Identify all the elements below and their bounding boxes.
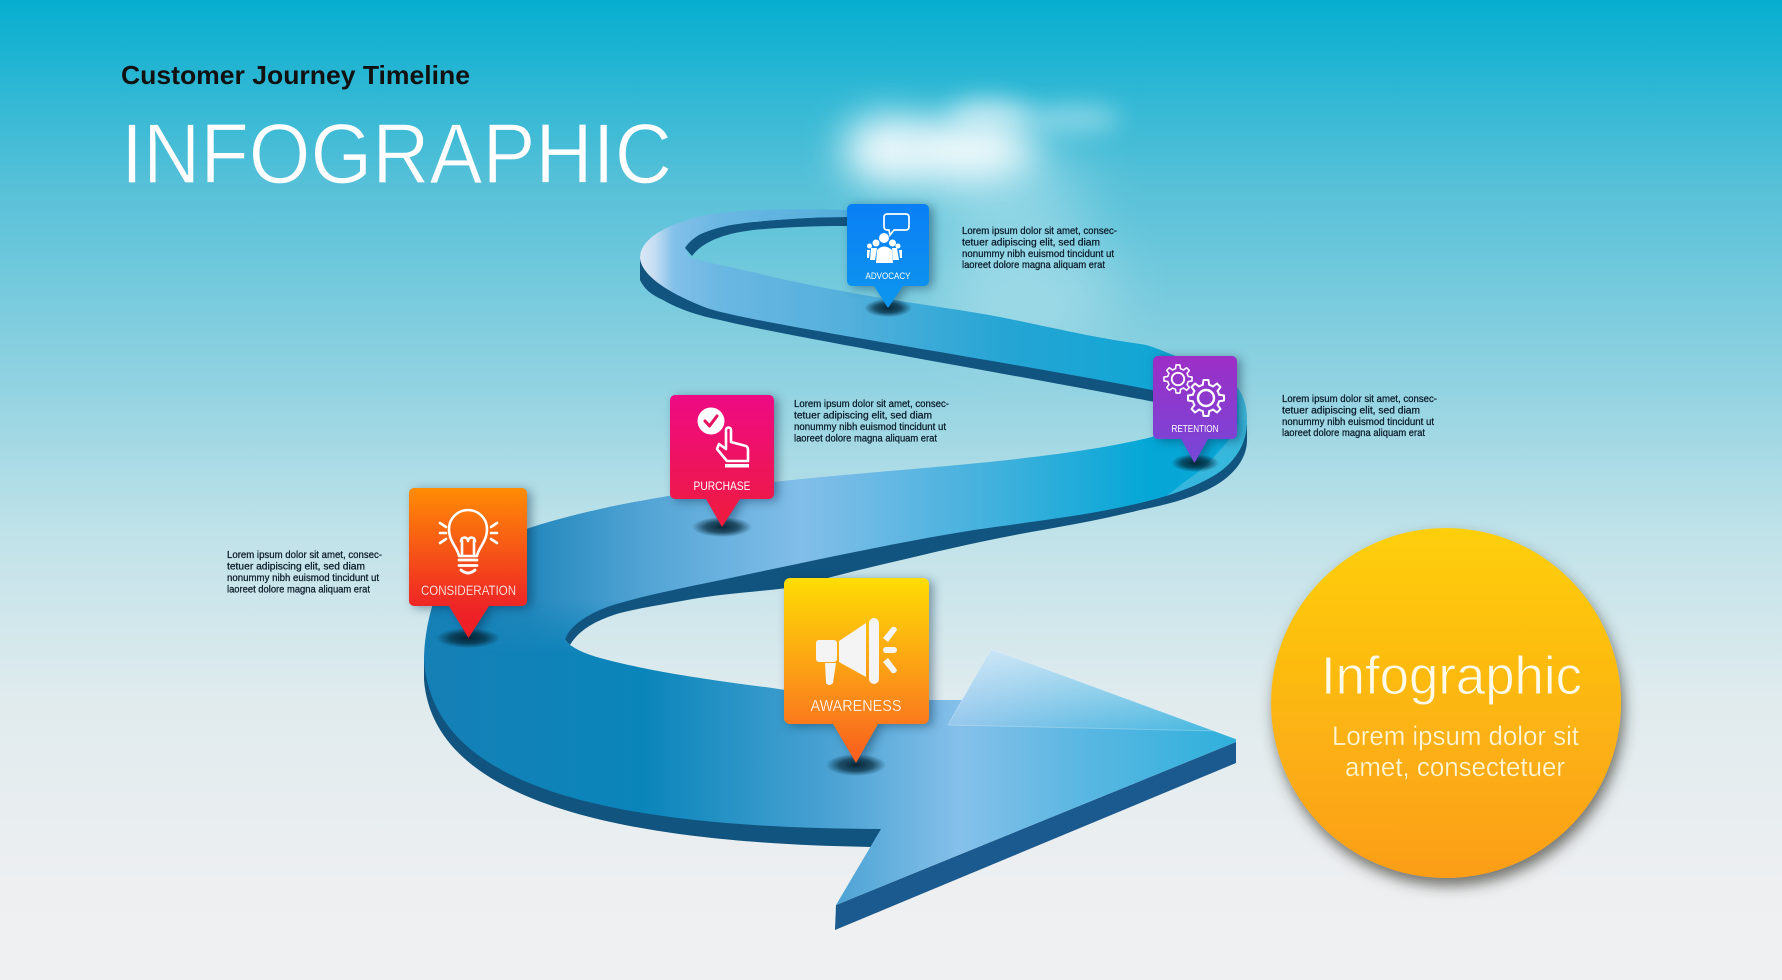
marker: advocacy bbox=[847, 204, 929, 317]
text block: consideration: Lorem ipsum dolor sit amet, consec- bbox=[227, 550, 382, 561]
text block: purchase: nonummy nibh euismod tincidunt ut bbox=[794, 422, 946, 433]
text block: advocacy: nonummy nibh euismod tincidunt ut bbox=[962, 249, 1114, 260]
heading: INFOGRAPHIC: INFOGRAPHIC bbox=[121, 107, 672, 202]
road bend highlight bbox=[1166, 387, 1247, 496]
title: Customer Journey Timeline bbox=[121, 60, 470, 90]
text block: purchase: laoreet dolore magna aliquam erat bbox=[794, 434, 937, 444]
callout circle bbox=[1271, 528, 1621, 878]
arrowhead glass highlight bbox=[948, 649, 1236, 739]
callout body: amet, consectetuer bbox=[1345, 752, 1565, 782]
text block: retention: Lorem ipsum dolor sit amet, consec- bbox=[1282, 394, 1437, 405]
text block: consideration: laoreet dolore magna aliquam erat bbox=[227, 584, 370, 596]
text block: purchase: Lorem ipsum dolor sit amet, consec- bbox=[794, 399, 949, 410]
marker: retention: RETENTION bbox=[1172, 424, 1218, 435]
text block: retention bbox=[1282, 394, 1437, 439]
icon: gears bbox=[1164, 365, 1224, 416]
text block: advocacy: Lorem ipsum dolor sit amet, consec- bbox=[962, 226, 1117, 237]
text block: advocacy bbox=[962, 226, 1117, 271]
icon: hand with check bbox=[698, 408, 749, 468]
text block: purchase bbox=[794, 399, 949, 444]
marker: consideration: CONSIDERATION bbox=[421, 582, 516, 598]
marker: consideration bbox=[409, 488, 527, 648]
icon: megaphone bbox=[816, 618, 897, 685]
road surface: top curve bbox=[640, 209, 1247, 420]
road surface: lower curve with arrowhead bbox=[424, 599, 1236, 905]
text block: advocacy: tetuer adipiscing elit, sed diam bbox=[962, 238, 1100, 248]
text block: consideration: nonummy nibh euismod tincidunt ut bbox=[227, 573, 379, 584]
text block: consideration: tetuer adipiscing elit, sed diam bbox=[227, 562, 365, 572]
winding road arrow bbox=[424, 209, 1247, 930]
text block: retention: nonummy nibh euismod tincidunt ut bbox=[1282, 417, 1434, 428]
callout heading: Infographic bbox=[1321, 646, 1582, 706]
marker: advocacy: ADVOCACY bbox=[866, 271, 911, 282]
text block: consideration bbox=[227, 550, 382, 596]
marker: purchase: PURCHASE bbox=[694, 479, 750, 493]
marker: purchase bbox=[670, 395, 774, 537]
icon: people with speech bubble bbox=[867, 214, 909, 263]
cloud bbox=[843, 99, 1121, 345]
marker: awareness: AWARENESS bbox=[810, 698, 902, 715]
text block: advocacy: laoreet dolore magna aliquam erat bbox=[962, 260, 1105, 271]
road arrowhead side bbox=[835, 742, 1236, 930]
marker: retention bbox=[1153, 356, 1237, 472]
callout body: Lorem ipsum dolor sit bbox=[1332, 721, 1580, 751]
callout body bbox=[1332, 721, 1580, 782]
marker: awareness bbox=[784, 578, 929, 776]
text block: purchase: tetuer adipiscing elit, sed diam bbox=[794, 410, 932, 422]
road side walls bbox=[424, 217, 1247, 847]
icon: light bulb bbox=[440, 510, 497, 573]
text block: retention: laoreet dolore magna aliquam erat bbox=[1282, 428, 1425, 439]
road surface: middle curve bbox=[424, 418, 1247, 662]
text block: retention: tetuer adipiscing elit, sed diam bbox=[1282, 406, 1420, 416]
